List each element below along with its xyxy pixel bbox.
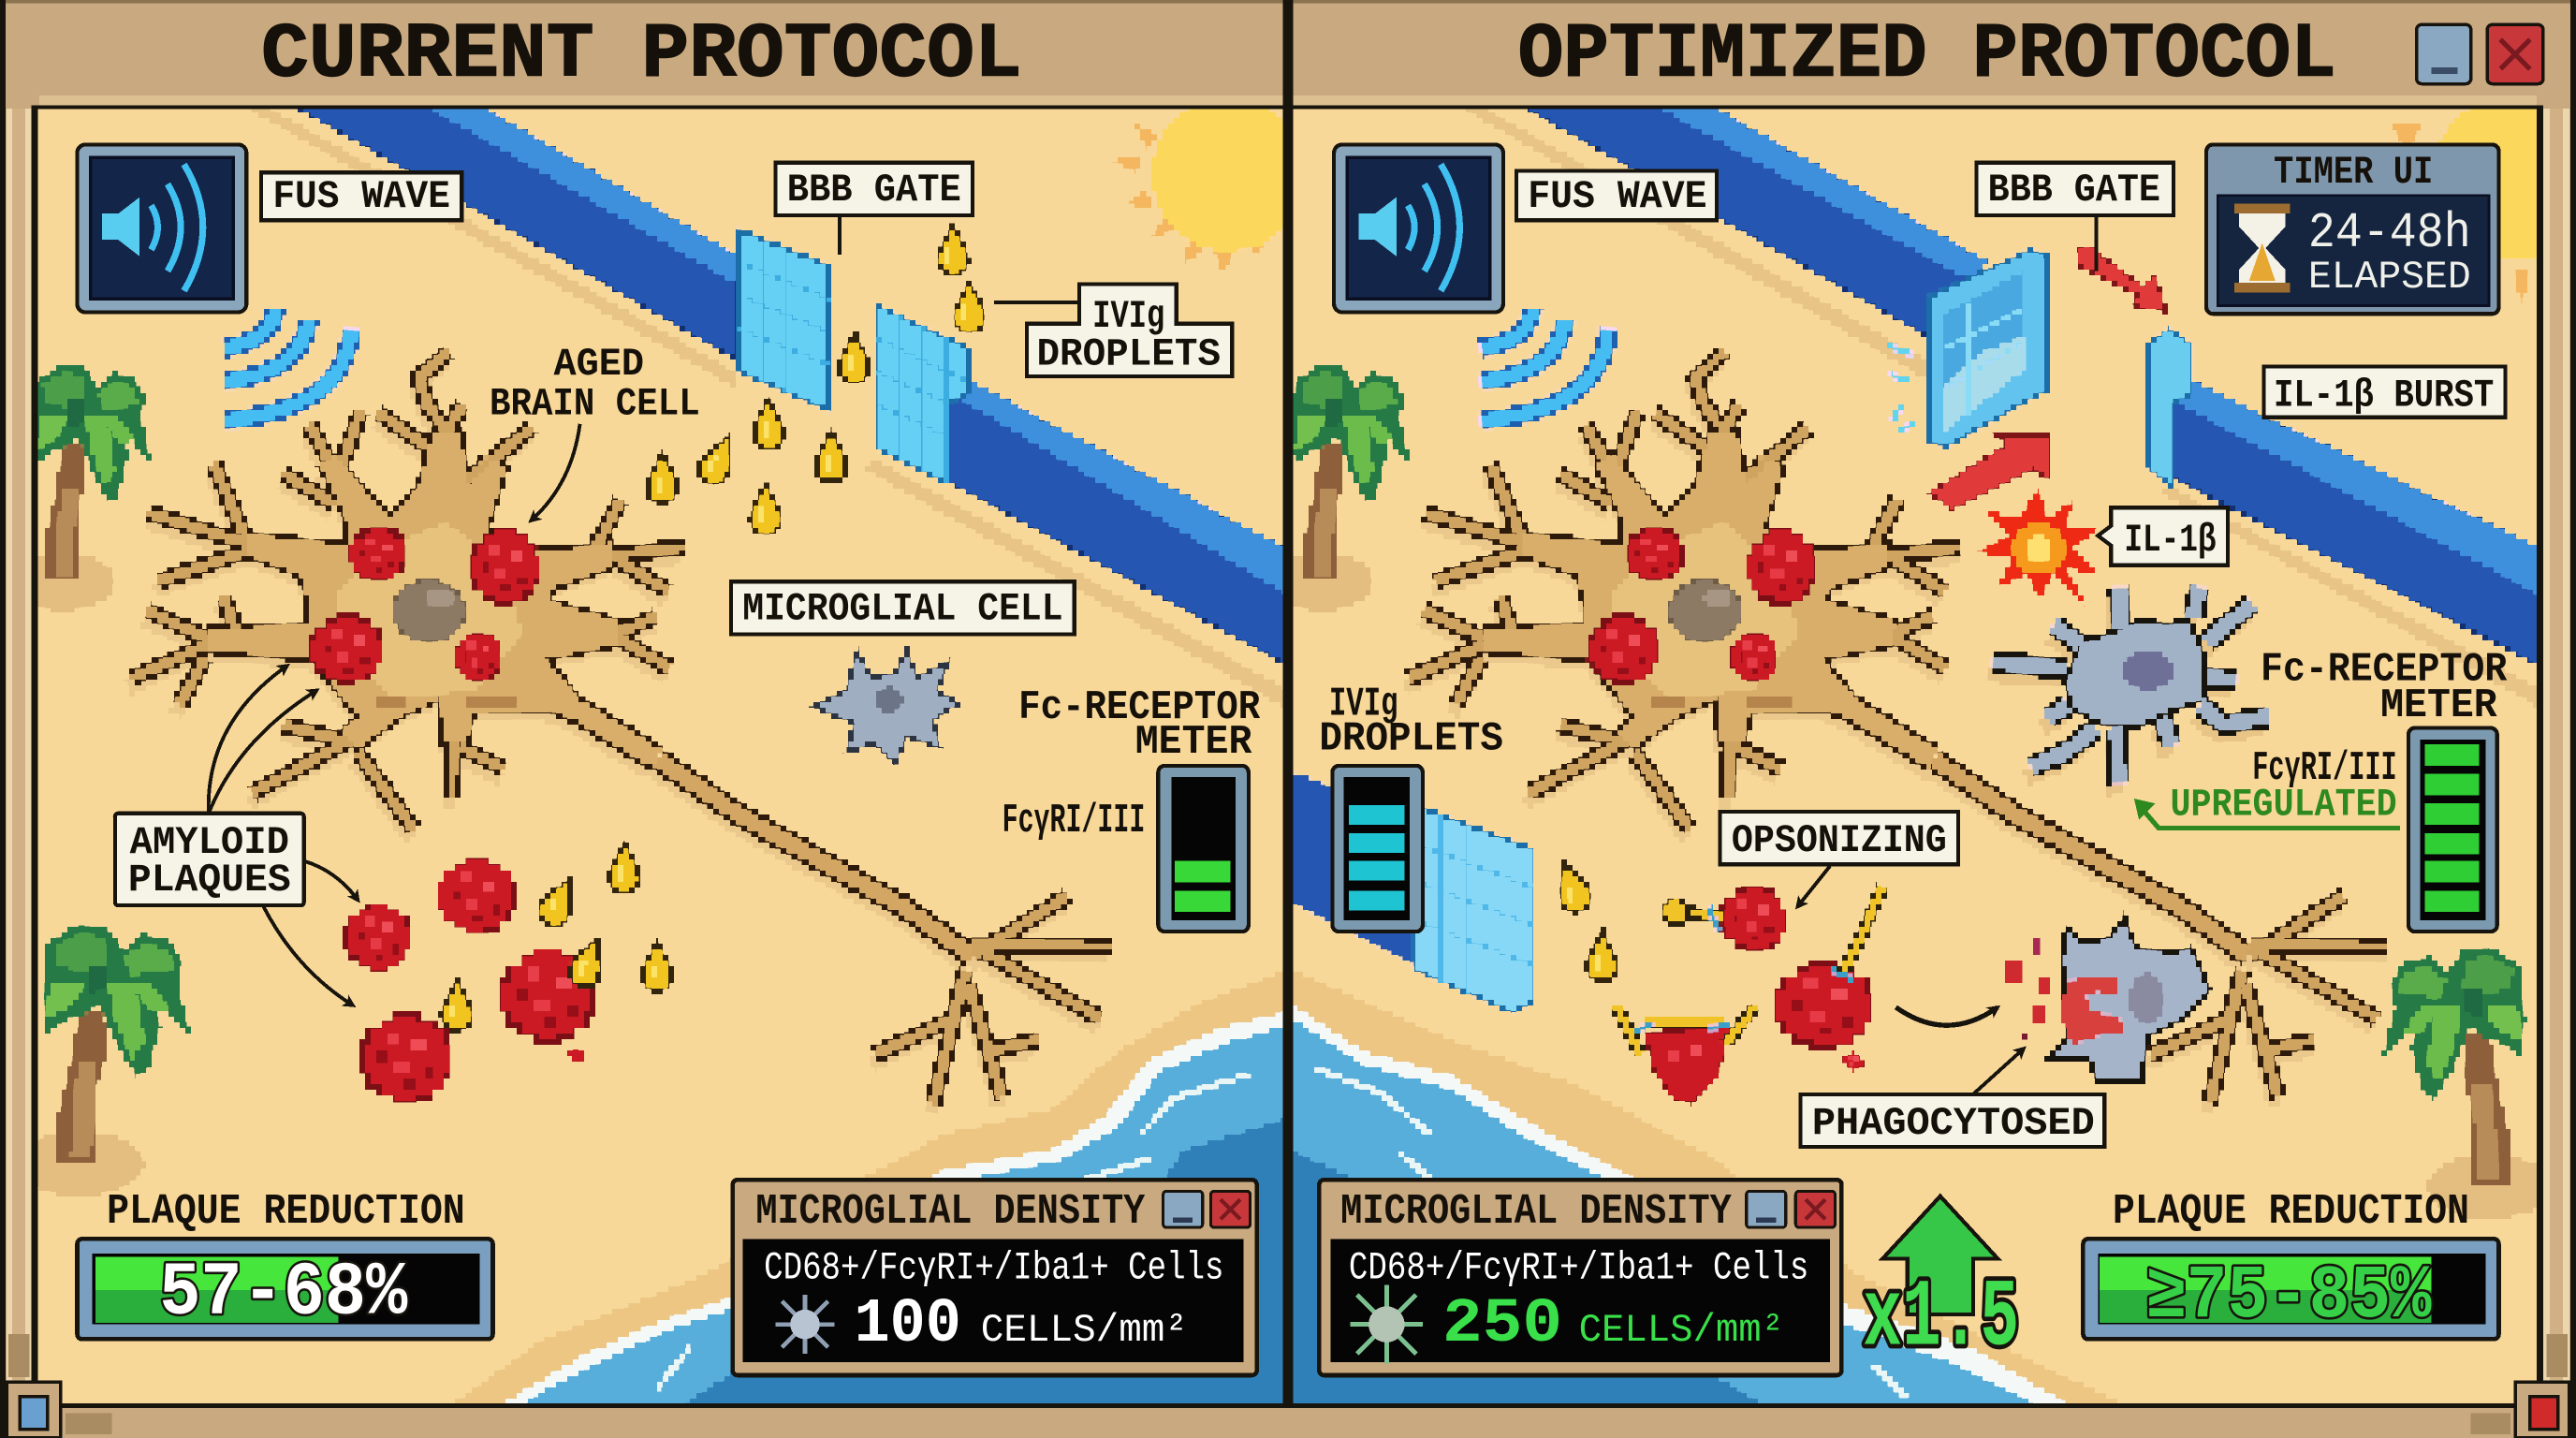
BBB wall: lower (948, 383, 1288, 666)
microglia phagocytosing (2004, 917, 2210, 1083)
corner button: right (2515, 1382, 2569, 1438)
microglial density window: 100 (855, 1289, 961, 1360)
corner button: left (7, 1382, 61, 1438)
labels and gauges: current protocol (77, 144, 1261, 1375)
plaque reduction bar (2083, 1187, 2499, 1340)
wall shadows (1462, 109, 1928, 381)
Fc-receptor meter (1003, 684, 1261, 932)
icon: FUS speaker (77, 144, 246, 312)
Fc-receptor meter upregulated (2134, 647, 2508, 932)
BBB wall: upper (299, 109, 735, 359)
neuron: aged brain cell (128, 352, 1112, 1114)
microglial density window: CD68+/FcγRI+/Iba1+ Cells (1349, 1245, 1808, 1290)
sand background (33, 98, 1298, 1413)
label: IVIg droplets (994, 285, 1232, 377)
sand background (1281, 98, 2546, 1413)
label: FUS WAVE: FUS WAVE (1528, 174, 1707, 219)
IVIg droplets (442, 222, 984, 1030)
palm tree upper (1268, 363, 1412, 611)
label: FUS WAVE: FUS WAVE (272, 174, 450, 219)
gate: left lower (1414, 805, 1533, 1012)
water (444, 970, 1288, 1410)
label: BBB GATE (775, 163, 973, 255)
BBB wall: lower (2170, 383, 2539, 666)
water (1293, 970, 2136, 1410)
BBB wall: upper (1526, 109, 1986, 337)
label: opsonizing: OPSONIZING (1732, 818, 1947, 863)
title: current protocol: CURRENT PROTOCOL (261, 11, 1022, 99)
labels and gauges: optimized protocol (1319, 144, 2508, 1375)
microglial cell activated (1986, 587, 2269, 795)
IVIg droplet meter (1319, 681, 1503, 932)
BBB gate: opened (1886, 250, 2191, 487)
droplets (1549, 856, 1617, 981)
label: phagocytosed: PHAGOCYTOSED (1812, 1101, 2095, 1146)
IL-1β burst (1975, 487, 2100, 611)
label: BBB GATE (1976, 163, 2174, 271)
window button: minimize (2417, 24, 2471, 84)
plaque reduction bar: 57-68% (159, 1251, 408, 1336)
timer UI (2206, 144, 2499, 314)
microglial density window: 250 (1442, 1289, 1562, 1360)
label: IVIg droplets: IVIg (1092, 294, 1164, 339)
label: microglial cell: MICROGLIAL CELL (742, 587, 1063, 632)
label: aged brain cell: BRAIN CELL (490, 381, 700, 426)
IVIg droplet meter: IVIg (1329, 681, 1398, 727)
label: IL-1β: IL-1β (2124, 518, 2217, 563)
microglial density window: CELLS/mm² (1579, 1308, 1784, 1353)
timer UI: TIMER UI (2274, 150, 2433, 195)
label: opsonizing (1720, 812, 1958, 907)
icon: FUS waves (224, 309, 352, 420)
Fc-receptor meter: FcγRI/III (1003, 798, 1145, 844)
label: IVIg droplets: DROPLETS (1036, 332, 1221, 377)
plaque reduction bar: PLAQUE REDUCTION (2113, 1187, 2469, 1236)
Fc-receptor meter upregulated: METER (2380, 682, 2497, 729)
Fc-receptor meter: METER (1135, 719, 1252, 766)
plaque reduction bar: PLAQUE REDUCTION (107, 1187, 465, 1236)
microglial density window: MICROGLIAL DENSITY (1340, 1187, 1732, 1236)
plaque reduction bar (77, 1187, 493, 1339)
amyloid plaques (345, 858, 611, 1103)
label: BBB GATE: BBB GATE (787, 168, 961, 213)
palm tree lower (37, 925, 191, 1196)
palm tree lower right (2381, 946, 2553, 1219)
window button: close (2487, 24, 2543, 84)
arrow: to phagocytosis (1895, 1007, 1998, 1025)
title: optimized protocol: OPTIMIZED PROTOCOL (1518, 11, 2336, 99)
icon: FUS waves (1480, 309, 1608, 420)
label: amyloid plaques: PLAQUES (128, 858, 291, 902)
Fc-receptor meter upregulated: UPREGULATED (2170, 783, 2397, 828)
opsonized plaques with antibodies (1617, 886, 1882, 1104)
label: aged brain cell (490, 342, 700, 521)
increase arrow x1.5 (1863, 1196, 2019, 1373)
sun (2391, 95, 2576, 312)
wall shadows (246, 109, 735, 388)
microglial density window (1319, 1180, 1841, 1375)
increase arrow x1.5: x1.5 (1863, 1265, 2019, 1373)
neuron: aged brain cell (1405, 352, 2389, 1114)
microglial density window: MICROGLIAL DENSITY (755, 1187, 1146, 1236)
plaque reduction bar: ≥75-85% (2145, 1255, 2432, 1340)
icon: FUS speaker (1334, 144, 1503, 312)
label: IL-1β BURST: IL-1β BURST (2274, 374, 2494, 418)
sun (1112, 109, 1282, 271)
microglial density window: CD68+/FcγRI+/Iba1+ Cells (764, 1245, 1224, 1290)
label: amyloid plaques (115, 666, 359, 1005)
Fc-receptor meter: Fc-RECEPTOR (1018, 684, 1261, 731)
label: BBB GATE: BBB GATE (1988, 168, 2160, 213)
label: IL-1β (2098, 507, 2228, 565)
panel: current protocol (10, 97, 1306, 1413)
red arrows (1928, 246, 2167, 509)
panel: optimized protocol (1268, 95, 2576, 1413)
label: phagocytosed (1801, 1049, 2104, 1147)
microglial density window (733, 1180, 1257, 1375)
label: amyloid plaques: AMYLOID (130, 820, 289, 865)
palm tree upper (37, 365, 152, 612)
IVIg droplet meter: DROPLETS (1319, 715, 1503, 762)
microglial cell small (812, 651, 959, 764)
label: aged brain cell: AGED (553, 342, 644, 387)
Fc-receptor meter upregulated: Fc-RECEPTOR (2261, 647, 2508, 694)
BBB wall: left segment (1293, 772, 1412, 964)
scene artwork: optimized protocol (1268, 95, 2576, 1413)
scene artwork: current protocol (10, 97, 1306, 1413)
icon: hourglass (2234, 204, 2291, 292)
microglial density window: CELLS/mm² (981, 1308, 1188, 1353)
timer UI: 24-48h (2308, 205, 2471, 261)
timer UI: ELAPSED (2308, 255, 2471, 300)
BBB gate: closed pair (739, 230, 968, 483)
Fc-receptor meter upregulated: FcγRI/III (2252, 745, 2397, 792)
